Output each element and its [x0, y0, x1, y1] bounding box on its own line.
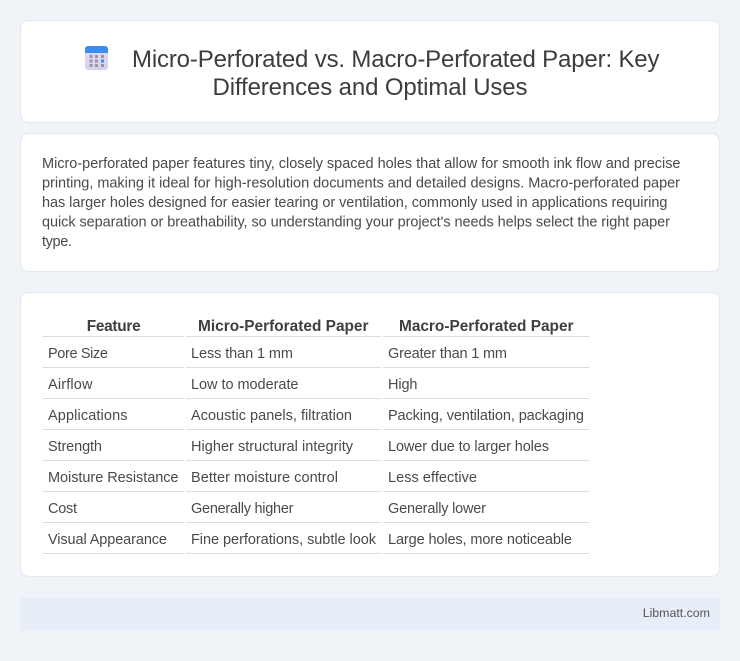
row: airflow [48, 377, 418, 393]
table header: Macro-Perforated Paper [399, 318, 574, 335]
text block: introduction: has larger holes designed for easier tearing or ventilation, commonly used in applications requiring [42, 195, 668, 211]
row: airflow: Airflow [48, 377, 93, 393]
row: pore size: Pore Size [48, 346, 108, 362]
row: applications [48, 408, 584, 424]
text block: introduction: Micro-perforated paper features tiny, closely spaced holes that allow for smooth ink flow and precise [42, 156, 680, 172]
text block: introduction: printing, making it ideal for high-resolution documents and detailed designs. Macro-perforated paper [42, 176, 680, 192]
footer: Libmatt.com [643, 606, 710, 620]
row: applications: Packing, ventilation, packaging [388, 408, 584, 424]
panel: comparison table [20, 292, 720, 576]
row: cost: Cost [48, 501, 77, 517]
icon: calendar grid [85, 46, 108, 70]
row: visual appearance: Large holes, more noticeable [388, 532, 572, 548]
text block: introduction: type. [42, 234, 72, 250]
row: visual appearance [48, 532, 572, 548]
row: strength [48, 439, 549, 455]
row: cost: Generally higher [191, 501, 294, 517]
row: airflow: High [388, 377, 418, 393]
row: visual appearance: Visual Appearance [48, 532, 167, 548]
row: pore size [48, 346, 507, 362]
title: Micro-Perforated vs. Macro-Perforated Paper: Key [132, 46, 660, 73]
panel: title header [20, 20, 720, 122]
row: applications: Acoustic panels, filtration [191, 408, 352, 424]
text block: introduction [42, 156, 680, 250]
table header: Feature [87, 318, 141, 335]
row: moisture resistance: Moisture Resistance [48, 470, 178, 486]
row: strength: Strength [48, 439, 102, 455]
row: pore size: Less than 1 mm [191, 346, 293, 362]
table header: Micro-Perforated Paper [198, 318, 368, 335]
panel: introduction [20, 134, 720, 272]
row: cost [48, 501, 486, 517]
row: moisture resistance: Less effective [388, 470, 477, 486]
row: cost: Generally lower [388, 501, 486, 517]
row: airflow: Low to moderate [191, 377, 298, 393]
row: visual appearance: Fine perforations, subtle look [191, 532, 377, 548]
text block: introduction: quick separation or breathability, so understanding your project's needs helps select the right paper [42, 214, 670, 230]
footer [20, 598, 720, 631]
title [132, 46, 660, 101]
row: moisture resistance: Better moisture control [191, 470, 338, 486]
row: strength: Lower due to larger holes [388, 439, 549, 455]
row: pore size: Greater than 1 mm [388, 346, 507, 362]
row: strength: Higher structural integrity [191, 439, 354, 455]
row: moisture resistance [48, 470, 477, 486]
title: Differences and Optimal Uses [212, 74, 528, 101]
table header [87, 318, 573, 335]
row: applications: Applications [48, 408, 128, 424]
